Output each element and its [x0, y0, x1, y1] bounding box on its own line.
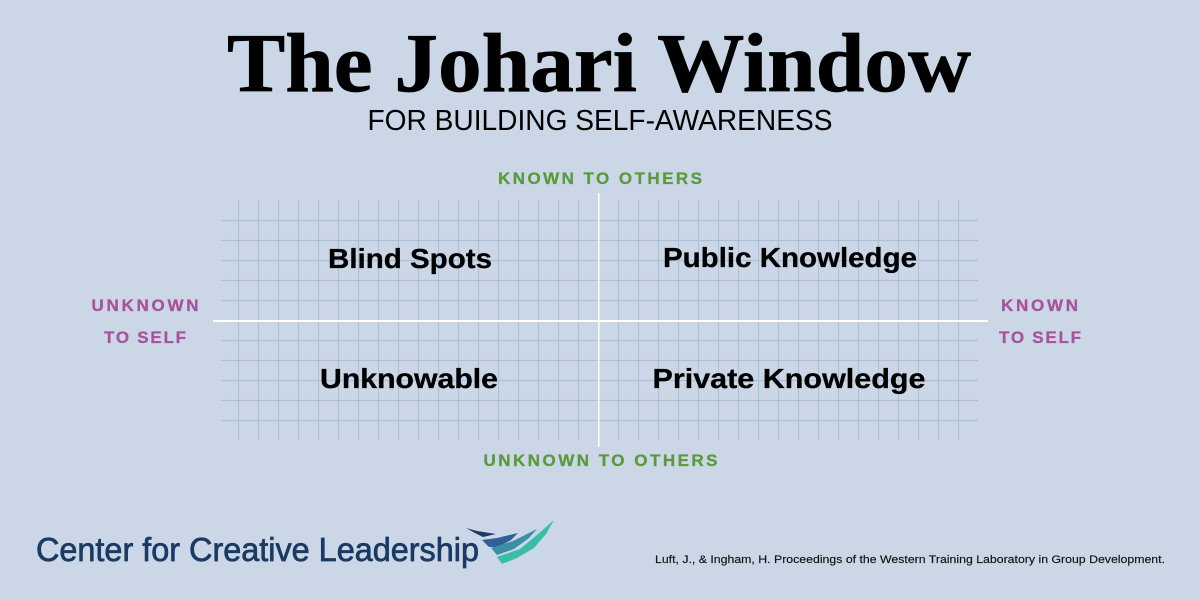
logo wordmark: Center for Creative Leadership	[36, 531, 479, 568]
quadrant: public knowledge: Public Knowledge	[663, 242, 917, 273]
axis label: unknown to self: TO SELF	[104, 328, 186, 347]
axis label: known to self	[999, 296, 1081, 347]
logo: Center for Creative Leadership	[36, 520, 554, 568]
axis label: known to others: KNOWN TO OTHERS	[498, 169, 702, 188]
axis label: unknown to self: UNKNOWN	[92, 296, 198, 315]
axis label: known to self: KNOWN	[1001, 296, 1078, 315]
logo mark: swoosh	[466, 520, 554, 564]
axis label: unknown to self	[92, 296, 198, 347]
quadrant: private knowledge: Private Knowledge	[652, 363, 926, 394]
citation: Luft, J., & Ingham, H. Proceedings of the Western Training Laboratory in Group Development.	[655, 554, 1165, 566]
quadrant: blind spots: Blind Spots	[328, 243, 492, 274]
horizontal axis	[213, 320, 988, 322]
subtitle: FOR BUILDING SELF-AWARENESS	[368, 105, 832, 137]
title: The Johari Window	[227, 17, 971, 110]
axis label: known to self: TO SELF	[999, 328, 1081, 347]
axis label: unknown to others: UNKNOWN TO OTHERS	[484, 451, 718, 470]
quadrant: unknowable: Unknowable	[320, 363, 498, 394]
vertical axis	[598, 193, 600, 447]
quadrant grid	[213, 193, 988, 447]
